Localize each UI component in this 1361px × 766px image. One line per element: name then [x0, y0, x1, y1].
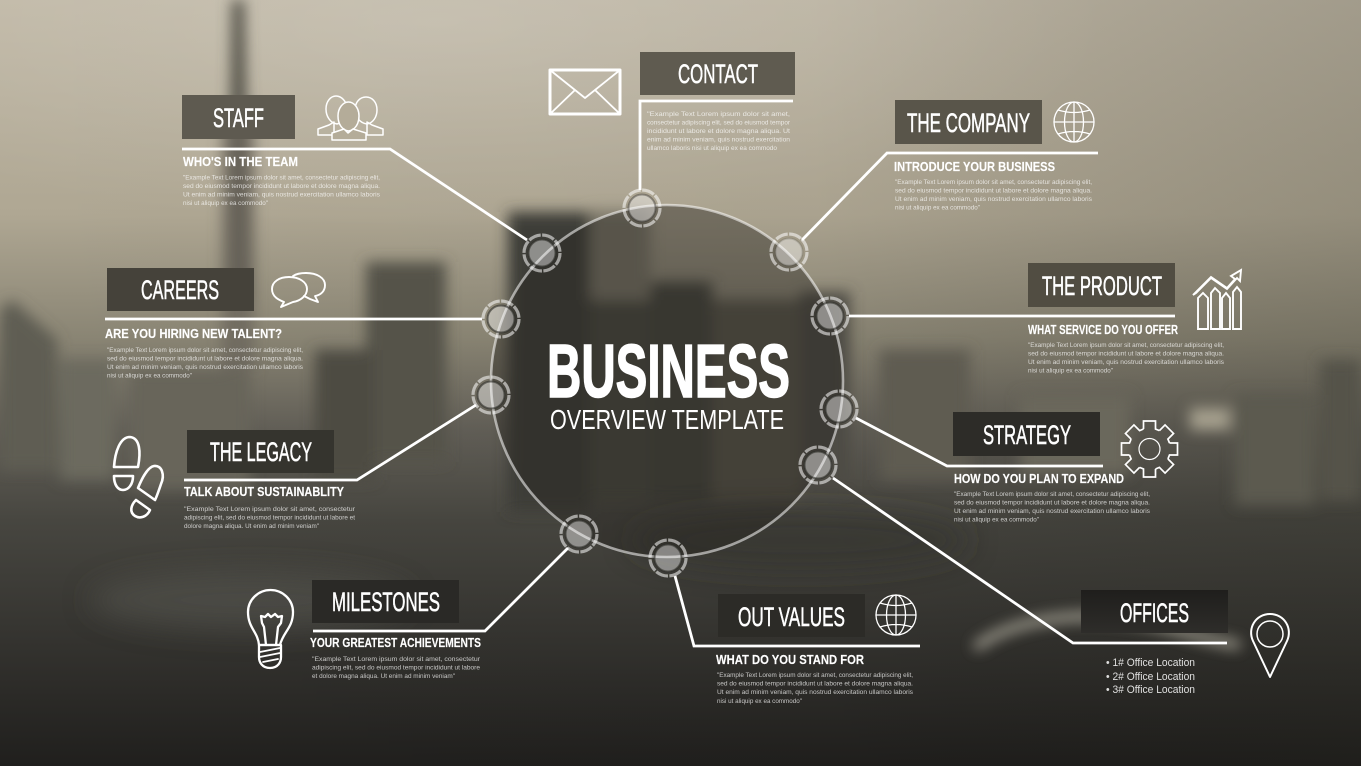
icon: speech bubbles: [272, 273, 325, 307]
panel: staff: WHO'S IN THE TEAM: [183, 154, 298, 169]
panel: milestones: adipiscing elit, sed do eiusmod tempor incididunt ut labore: [312, 664, 480, 672]
panel: staff: nisi ut aliquip ex ea commodo": [183, 200, 268, 207]
panel: careers: sed do eiusmod tempor incididunt ut labore et dolore magna aliqua.: [107, 356, 303, 362]
title: [547, 329, 790, 435]
panel: staff: sed do eiusmod tempor incididunt ut labore et dolore magna aliqua.: [183, 183, 380, 190]
panel: the product: "Example Text Lorem ipsum dolor sit amet, consectetur adipiscing elit,: [1028, 342, 1224, 349]
icon: globe: [1054, 102, 1094, 142]
panel: milestones: et dolore magna aliqua. Ut enim ad minim veniam": [312, 673, 455, 680]
panel: the company: nisi ut aliquip ex ea commodo": [895, 204, 980, 212]
panel: strategy: sed do eiusmod tempor incididunt ut labore et dolore magna aliqua.: [954, 500, 1150, 506]
panel: the product: nisi ut aliquip ex ea commodo": [1028, 368, 1113, 374]
panel: strategy: "Example Text Lorem ipsum dolor sit amet, consectetur adipiscing elit,: [954, 491, 1150, 498]
panel: the company: sed do eiusmod tempor incididunt ut labore et dolore magna aliqua.: [895, 188, 1092, 194]
icon: envelope: [550, 70, 620, 114]
panel: the company: [802, 100, 1098, 240]
title: OVERVIEW TEMPLATE: [550, 404, 784, 435]
panel: contact: ullamco laboris nisi ut aliquip ex ea commodo: [647, 145, 777, 152]
icon: globe values: [876, 595, 916, 635]
panel: strategy: nisi ut aliquip ex ea commodo": [954, 516, 1039, 524]
panel: careers: Ut enim ad minim veniam, quis nostrud exercitation ullamco laboris: [107, 364, 303, 371]
panel: the legacy: THE LEGACY: [210, 437, 312, 467]
panel: offices: • 3# Office Location: [1106, 684, 1195, 696]
panel: the product: Ut enim ad minim veniam, quis nostrud exercitation ullamco laboris: [1028, 359, 1224, 366]
title: BUSINESS: [547, 329, 790, 413]
panel: the product: sed do eiusmod tempor incididunt ut labore et dolore magna aliqua.: [1028, 350, 1224, 358]
panel: offices: OFFICES: [1120, 598, 1189, 628]
panel: out values: "Example Text Lorem ipsum dolor sit amet, consectetur adipiscing elit,: [717, 672, 913, 679]
panel: the company: INTRODUCE YOUR BUSINESS: [894, 159, 1055, 174]
panel: contact: [640, 52, 795, 190]
panel: staff: Ut enim ad minim veniam, quis nostrud exercitation ullamco laboris: [183, 192, 380, 198]
panel: careers: CAREERS: [141, 275, 219, 305]
panel: the company: Ut enim ad minim veniam, quis nostrud exercitation ullamco laboris: [895, 196, 1092, 203]
panel: staff: [182, 95, 527, 240]
node markers on circle: [473, 190, 857, 576]
panel: offices: • 1# Office Location: [1106, 657, 1195, 669]
panel: contact: incididunt ut labore et dolore magna aliqua. Ut: [647, 128, 790, 135]
panel: strategy: Ut enim ad minim veniam, quis nostrud exercitation ullamco laboris: [954, 508, 1150, 515]
icon: rising bar chart: [1193, 270, 1241, 329]
panel: milestones: MILESTONES: [332, 587, 440, 617]
panel: careers: ARE YOU HIRING NEW TALENT?: [105, 326, 282, 341]
panel: contact: CONTACT: [678, 59, 758, 89]
panel: the company: "Example Text Lorem ipsum dolor sit amet, consectetur adipiscing elit,: [895, 179, 1092, 186]
icon: gear: [1122, 421, 1178, 477]
panel: offices: • 2# Office Location: [1106, 671, 1195, 683]
central circle: [491, 205, 843, 557]
panel: out values: sed do eiusmod tempor incididunt ut labore et dolore magna aliqua.: [717, 680, 913, 688]
panel: milestones: "Example Text Lorem ipsum dolor sit amet, consectetur: [312, 656, 481, 663]
icon: team of people: [318, 96, 383, 140]
panel: careers: nisi ut aliquip ex ea commodo": [107, 372, 192, 380]
panel: the legacy: adipiscing elit, sed do eiusmod tempor incididunt ut labore et: [184, 514, 355, 522]
panel: strategy: [856, 412, 1150, 524]
panel: strategy: HOW DO YOU PLAN TO EXPAND: [954, 471, 1124, 486]
panel: the product: THE PRODUCT: [1042, 271, 1162, 301]
panel: staff: "Example Text Lorem ipsum dolor sit amet, consectetur adipiscing elit,: [183, 174, 380, 182]
panel: out values: nisi ut aliquip ex ea commodo": [717, 698, 802, 705]
panel: staff: STAFF: [213, 103, 264, 133]
icon: location pin: [1251, 614, 1289, 677]
panel: careers: [105, 268, 482, 380]
panel: milestones: [310, 548, 568, 680]
panel: out values: WHAT DO YOU STAND FOR: [716, 652, 865, 667]
panel: the legacy: [184, 405, 476, 530]
icon: footprints: [114, 437, 163, 517]
panel: out values: [675, 576, 920, 705]
panel: the company: THE COMPANY: [907, 108, 1030, 138]
panel: the product: WHAT SERVICE DO YOU OFFER: [1028, 322, 1178, 337]
icon: light bulb: [248, 590, 293, 668]
panel: out values: Ut enim ad minim veniam, quis nostrud exercitation ullamco laboris: [717, 689, 913, 696]
panel: strategy: STRATEGY: [983, 420, 1071, 450]
panel: contact: "Example Text Lorem ipsum dolor sit amet,: [647, 111, 790, 118]
panel: careers: "Example Text Lorem ipsum dolor sit amet, consectetur adipiscing elit,: [107, 347, 303, 354]
panel: the legacy: TALK ABOUT SUSTAINABLITY: [184, 484, 344, 499]
panel: the product: [849, 263, 1224, 374]
panel: milestones: YOUR GREATEST ACHIEVEMENTS: [310, 635, 481, 650]
panel: the legacy: dolore magna aliqua. Ut enim ad minim veniam": [184, 523, 319, 530]
panel: contact: enim ad minim veniam, quis nostrud exercitation: [647, 136, 790, 144]
panel: the legacy: "Example Text Lorem ipsum dolor sit amet, consectetur: [184, 506, 356, 513]
panel: out values: OUT VALUES: [738, 602, 845, 632]
panel: contact: consectetur adipiscing elit, sed do eiusmod tempor: [647, 120, 791, 126]
panel: offices: [833, 478, 1228, 696]
